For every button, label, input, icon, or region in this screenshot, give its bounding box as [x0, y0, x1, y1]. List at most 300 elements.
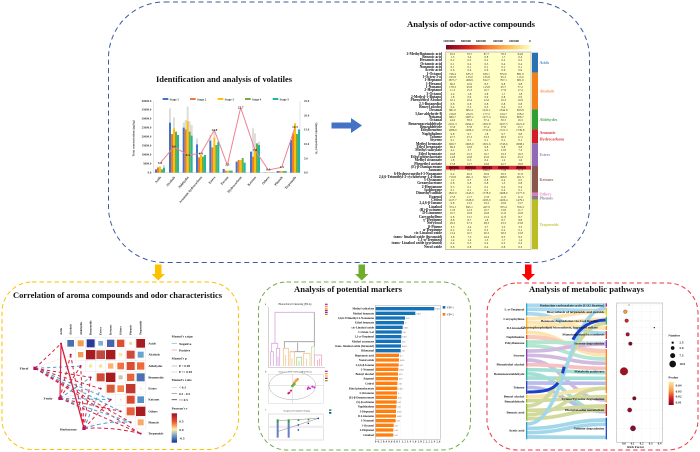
- heatmap table: 27.3: [467, 135, 472, 139]
- heatmap colour scale: 800000: [461, 39, 471, 43]
- mantel legend: 0.0: [179, 428, 184, 432]
- VIP significance labels: 0.001: [402, 346, 406, 348]
- heatmap table: 104.7: [500, 112, 507, 116]
- heatmap table: 9.8: [484, 145, 488, 149]
- heatmap table: 0.6: [501, 68, 505, 72]
- heatmap table: 802.4: [466, 108, 473, 112]
- VIP significance labels: 0.1: [400, 355, 402, 357]
- heatmap table: 9.3: [518, 235, 522, 239]
- legend: stages: Stage 2: [197, 97, 207, 101]
- heatmap table: 0.5: [518, 178, 522, 182]
- heatmap table: 2098.1: [516, 142, 524, 146]
- heatmap table: Nerol oxide: [424, 245, 442, 249]
- row labels: Aldehydes: [148, 364, 163, 368]
- heatmap table: 28.3: [501, 135, 506, 139]
- heatmap table: 1743.6: [499, 142, 507, 146]
- heatmap table: 0.3: [518, 105, 522, 109]
- heatmap table: 1328.0: [465, 198, 474, 202]
- line value labels: 22.7: [238, 106, 244, 110]
- heatmap table: 797.1: [500, 78, 507, 82]
- row labels: Acids: [148, 341, 157, 345]
- heatmap table: 1608.0: [499, 191, 507, 195]
- heatmap table: 8.7: [501, 218, 505, 222]
- heatmap table: 3.3: [518, 225, 522, 229]
- VIP labels: 1-Nonanal: [361, 419, 374, 423]
- column labels: Benzenoids: [89, 320, 93, 335]
- heatmap table: 2,3-Butanediol: [419, 102, 442, 106]
- VIP<1 orange bars: [376, 354, 399, 437]
- heatmap table: 861.0: [449, 108, 456, 112]
- heatmap table: 10.7: [484, 88, 489, 92]
- VIP bar chart: [335, 305, 454, 443]
- heatmap category labels: Phenols: [540, 196, 553, 200]
- left axis ticks: 15000.0: [142, 144, 152, 148]
- heatmap table: 0.2: [451, 58, 454, 62]
- heatmap table: 1731.6: [482, 128, 490, 132]
- heatmap table: 24.6: [450, 118, 455, 122]
- heatmap table: 15.7: [518, 125, 523, 129]
- category labels: Others: [261, 175, 271, 185]
- heatmap table: 95.7: [501, 85, 506, 89]
- VIP labels: Methyl benzoate: [353, 311, 375, 315]
- heatmap table: 0.8: [518, 102, 522, 106]
- heatmap table: Octanoic acid: [420, 62, 442, 66]
- heatmap table: 28.3: [484, 221, 489, 225]
- heatmap table: 25.6: [484, 155, 489, 159]
- heatmap table: α-Terpinene: [423, 228, 442, 232]
- heatmap table: 77.2: [518, 85, 523, 89]
- heatmap table: 806.7: [517, 115, 524, 119]
- heatmap table: 0.9: [518, 95, 522, 99]
- heatmap table: 1-Nonanol: [426, 85, 442, 89]
- heatmap highlighted row: [446, 166, 531, 170]
- heatmap table: 115.0: [517, 75, 524, 79]
- heatmap table: Benzoic acid: [422, 55, 442, 59]
- heatmap table: 0.2: [484, 228, 488, 232]
- heatmap table: 1479.1: [516, 198, 524, 202]
- heatmap table: Phenylethyl Alcohol: [411, 98, 442, 102]
- VIP labels: 2,4,6-β-Ionone: [356, 363, 375, 367]
- heatmap table: 466.9: [466, 78, 473, 82]
- heatmap table: Acetic acid: [425, 68, 442, 72]
- heatmap table: 13.3: [484, 215, 489, 219]
- heatmap table: 47.7: [450, 135, 455, 139]
- heatmap table: 10.8: [518, 211, 523, 215]
- heatmap table: 39.3: [501, 172, 506, 176]
- VIP>1 blue bars: [376, 307, 434, 352]
- heatmap table: 2101.3: [448, 122, 457, 126]
- sankey flows: [527, 305, 606, 437]
- heatmap table: 16.3: [518, 118, 523, 122]
- heatmap table: 87.7: [484, 52, 489, 56]
- heatmap table: 222.9: [466, 112, 473, 116]
- heatmap table: D-Limonene: [422, 211, 442, 215]
- heatmap table: 0.4: [451, 241, 454, 245]
- right axis ticks: [304, 99, 310, 175]
- VIP significance labels: 0.01: [399, 379, 402, 381]
- heatmap table: 606.7: [449, 142, 456, 146]
- VIP significance labels: 0.001: [398, 388, 403, 390]
- heatmap category labels: Esters: [540, 152, 551, 157]
- mantel legend: Mantel's r.abs: [172, 378, 192, 382]
- heatmap table: 1086.0: [448, 128, 457, 132]
- heatmap table: 901.3: [483, 165, 490, 169]
- heatmap table: 1,1-α-Terpineol: [418, 238, 442, 242]
- VIP significance labels: 0.01: [398, 383, 402, 385]
- arrow: orange down: [152, 264, 165, 280]
- VIP significance labels: 0.001: [400, 360, 404, 362]
- legend: stages: Stage 5: [280, 97, 289, 101]
- sankey left labels: Naphthalene: [506, 335, 525, 339]
- pvalue legend: 0.04: [676, 384, 682, 388]
- heatmap table: 8.7: [468, 218, 471, 222]
- heatmap table: 4.2: [451, 148, 454, 152]
- heatmap category labels: Terpenoids: [540, 222, 559, 227]
- heatmap table: 2.8: [484, 92, 488, 96]
- bubble plot: 0.0: [622, 442, 626, 446]
- heading: odor-active compounds: Analysis of odor-active compounds: [407, 20, 536, 29]
- heatmap table: 1.7: [501, 238, 505, 242]
- heatmap table: 0.4: [484, 158, 488, 162]
- heatmap table: 16.8: [467, 155, 472, 159]
- VIP axis: 0 0.2 0.4 0.6 0.8 1 1.2 1.4 1.6 1.8 2 2.2 2.4 2.6: [375, 440, 441, 443]
- PCA score plot: [265, 370, 328, 403]
- heatmap frame: [446, 52, 531, 250]
- heatmap table: 681.6: [517, 78, 524, 82]
- sankey left labels: Phenylethyl alcohol: [497, 362, 524, 366]
- pvalue legend: [668, 376, 682, 405]
- heatmap table: 160.2: [483, 168, 490, 172]
- heatmap table: 0.8: [484, 178, 488, 182]
- mantel legend: -0.5: [179, 437, 185, 441]
- dendrogram: a: [265, 303, 267, 306]
- heatmap table: 872.0: [500, 72, 507, 76]
- heatmap table: 1.8: [484, 132, 488, 136]
- heatmap table: Ethylbenzene: [421, 128, 442, 132]
- heatmap table: 0.1: [518, 65, 522, 69]
- heatmap table: 16.7: [484, 152, 489, 156]
- VIP labels: Ethyl benzoate: [355, 321, 375, 325]
- VIP labels: 1-Octanol: [361, 423, 374, 427]
- heatmap table: 0.4: [501, 178, 505, 182]
- heatmap table: Linalool: [429, 205, 442, 209]
- VIP significance labels: 0.01: [403, 332, 406, 334]
- heatmap table: 16.8: [467, 145, 472, 149]
- category labels: Acids: [154, 175, 163, 184]
- heatmap table: Naphthalene: [422, 132, 442, 136]
- heatmap table: 881.0: [517, 72, 524, 76]
- bubble plot: 0.1: [631, 442, 635, 446]
- sankey left labels: Acetic acid: [509, 429, 524, 433]
- heatmap table: 13.8: [518, 231, 523, 235]
- stage 2 bars: [157, 129, 294, 173]
- heatmap table: 10.9: [467, 82, 472, 86]
- heatmap table: Geranylacetone: [417, 181, 442, 185]
- heatmap table: Eugenol: [429, 195, 442, 199]
- VIP labels: [335, 307, 375, 437]
- heatmap table: 374.1: [449, 205, 456, 209]
- mantel legend: 0.5: [179, 419, 184, 423]
- bubble plot: 0.4: [658, 442, 662, 446]
- PCA score plot: b: [265, 371, 267, 374]
- heatmap table: 38.3: [467, 118, 472, 122]
- heatmap table: 75.1: [467, 168, 472, 172]
- heatmap table: 1.4: [468, 238, 471, 242]
- arrow: red down: [522, 264, 535, 280]
- heatmap table: 1087.2: [465, 115, 474, 119]
- heatmap table: 0.8: [484, 181, 488, 185]
- line value labels: 15.5: [292, 125, 298, 129]
- right axis ticks: 25.0: [304, 99, 310, 103]
- heatmap table: 135.0: [466, 75, 473, 79]
- heatmap category bar: [532, 53, 538, 249]
- heatmap table: 0.3: [468, 105, 471, 109]
- heatmap table: 1-Heptanol: [424, 78, 442, 82]
- sankey left labels: Benzeneacetaldehyde: [494, 372, 525, 376]
- heatmap table: 37.8: [467, 125, 472, 129]
- heatmap table: 79.7: [467, 52, 472, 56]
- heatmap table: 17.8: [450, 162, 455, 166]
- heatmap table: 9.8: [501, 82, 505, 86]
- heatmap table: 10.1: [450, 98, 455, 102]
- heatmap table: 3.7: [468, 148, 471, 152]
- row labels: Terpenoids: [148, 432, 164, 436]
- line value labels: 6.9: [199, 151, 203, 155]
- heatmap table: 845.1: [466, 205, 473, 209]
- left axis ticks: 10000.0: [142, 153, 152, 157]
- sankey left labels: Benzaldehyde: [505, 399, 525, 403]
- column labels: Esters: [99, 326, 103, 335]
- heatmap table: 0.1: [451, 188, 454, 192]
- heatmap table: 0.9: [468, 95, 471, 99]
- heatmap table: 71.3: [518, 168, 523, 172]
- heatmap table: 13.4: [450, 231, 455, 235]
- heatmap table: 0.1: [468, 185, 471, 189]
- VIP labels: 1-Octen-3-ol: [358, 330, 374, 334]
- heatmap table: 1.4: [451, 238, 454, 242]
- heatmap table: 1301.6: [482, 142, 490, 146]
- heatmap table: 18.8: [518, 162, 523, 166]
- VIP labels: Ethyl phenylacetate: [349, 386, 375, 390]
- panel: top volatiles and odor-active compounds: [108, 2, 590, 262]
- heatmap table: 108.2: [517, 112, 524, 116]
- VIP labels: Nonal oxide: [359, 358, 375, 362]
- heatmap table: 0.2: [484, 185, 488, 189]
- heatmap table: 33.3: [484, 135, 489, 139]
- line value labels: 0.9: [266, 168, 271, 172]
- heatmap table: 11.8: [450, 208, 455, 212]
- heatmap table: 78.3: [501, 52, 506, 56]
- heatmap table: 0.1: [501, 65, 505, 69]
- number legend: 2.5: [679, 341, 684, 345]
- heatmap table: 11.0: [518, 195, 523, 199]
- sankey right labels: Reduction carboxylate cycle (CO2 fixation): [540, 303, 604, 307]
- heatmap table: 0.6: [484, 68, 488, 72]
- arrow: blue right: [332, 118, 362, 133]
- heatmap table: Hexanoic acid: [420, 58, 442, 62]
- legend: stages: Stage 1: [170, 97, 179, 101]
- heatmap table: 11.3: [450, 88, 455, 92]
- heatmap table: 4.3: [484, 148, 488, 152]
- heatmap table: Ethyl phenylacetate: [411, 155, 442, 159]
- left axis ticks: 20000.0: [142, 135, 152, 139]
- heatmap table: 3.8: [451, 235, 454, 239]
- heatmap table: (R)-β-ocimene: [420, 208, 442, 212]
- column labels: Acids: [59, 327, 63, 335]
- network nodes: [33, 343, 142, 435]
- left axis ticks: 25000.0: [142, 126, 152, 130]
- mantel legend: Pearson's r: [172, 406, 188, 410]
- heading: identification of volatiles: Identification and analysis of volatiles: [156, 75, 293, 84]
- heatmap table: 1561.8: [482, 122, 490, 126]
- left axis ticks: 30000.0: [142, 117, 152, 121]
- row labels: Others: [148, 409, 158, 413]
- VIP significance labels: 0.001: [416, 313, 421, 315]
- VIP labels: Cedrol: [365, 381, 374, 385]
- heatmap table: 95.8: [467, 85, 472, 89]
- heatmap table: 0.2: [484, 58, 488, 62]
- left axis ticks: 35000.0: [142, 108, 152, 112]
- heatmap table: 93.2: [450, 52, 455, 56]
- VIP significance labels: 0.001: [397, 411, 401, 413]
- heatmap table: Benzeneacetaldehyde: [408, 122, 442, 126]
- heatmap table: 37.4: [484, 118, 489, 122]
- sankey right labels: Biosynthesis of terpenoids and steroids: [547, 310, 605, 314]
- heatmap table: 0.1: [501, 138, 505, 142]
- heatmap table: 0.1: [484, 138, 488, 142]
- heatmap table: 1.2: [451, 178, 454, 182]
- permutation plot: [265, 409, 331, 440]
- heatmap table: 1.3: [484, 238, 488, 242]
- heatmap table: β-Pinene: [428, 225, 442, 229]
- bubble plot: [617, 303, 663, 449]
- right axis ticks: 10.0: [304, 142, 310, 146]
- heatmap table: 16.8: [450, 152, 455, 156]
- heatmap table: 9.7: [468, 132, 471, 136]
- heatmap table: 0.8: [484, 102, 488, 106]
- heatmap table: 0.3: [518, 245, 522, 249]
- heatmap table: 0.4: [501, 62, 505, 66]
- VIP significance labels: 0.01: [397, 407, 401, 409]
- number legend: [668, 333, 685, 367]
- heatmap table: Toluene: [430, 135, 442, 139]
- category labels: Aldehydes: [177, 175, 190, 189]
- heatmap table: 960.7: [449, 115, 456, 119]
- heatmap category labels: Ketones: [540, 177, 554, 182]
- VIP significance labels: 0.001: [399, 369, 404, 371]
- heatmap table: 1875.7: [448, 78, 457, 82]
- heatmap table: 0.1: [484, 188, 488, 192]
- right axis ticks: 5.0: [304, 156, 308, 160]
- heatmap table: 1.6: [518, 158, 522, 162]
- heatmap table: 0.8: [501, 245, 505, 249]
- heatmap table: 1269.2: [465, 128, 474, 132]
- heatmap table: 2221.9: [516, 122, 524, 126]
- bubble plot: 0.3: [649, 442, 653, 446]
- heatmap table: 8.8: [518, 218, 522, 222]
- heatmap table: 15.3: [467, 152, 472, 156]
- category labels: [154, 175, 298, 204]
- sankey right labels: Metabolic pathways: [574, 369, 605, 373]
- heatmap table: 498.0: [500, 175, 507, 179]
- VIP labels: 3-Heptanol: [360, 409, 374, 413]
- heatmap table: 13.3: [467, 201, 472, 205]
- dendrogram: [265, 303, 328, 367]
- heatmap table: 0.2: [468, 228, 471, 232]
- heatmap table: 0.1: [484, 65, 488, 69]
- heatmap table: 177.2: [483, 112, 490, 116]
- heatmap table: 12.6: [484, 98, 489, 102]
- heatmap table: 195.8: [449, 75, 456, 79]
- heatmap table: 0.1: [451, 62, 454, 66]
- VIP significance labels: 0.001: [397, 416, 401, 418]
- number legend: 10.0: [679, 362, 685, 366]
- heatmap table: 15.3: [467, 88, 472, 92]
- pvalue legend: 0.03: [676, 389, 682, 393]
- heatmap table: 1406.4: [499, 198, 507, 202]
- heatmap table: 0.4: [484, 241, 488, 245]
- heatmap table: 0.8: [518, 181, 522, 185]
- heatmap table: Cedrol: [431, 198, 442, 202]
- heatmap table: Nonanal: [429, 115, 442, 119]
- heatmap table: 0.8: [501, 102, 505, 106]
- heatmap table: 0.8: [451, 181, 454, 185]
- heatmap table: 9.8: [518, 82, 522, 86]
- heatmap table: 0.6: [468, 68, 471, 72]
- heatmap table: 1063.9: [465, 142, 474, 146]
- chart: volatile concentration by stage: [131, 97, 319, 204]
- heatmap table: Ethyl hexanoate: [416, 145, 442, 149]
- VIP labels: trans- linalool oxide (furanoid): [335, 344, 374, 348]
- VIP labels: 1-Nonanol: [361, 367, 374, 371]
- heatmap table: 37.8: [501, 125, 506, 129]
- PCA score plot: Scores on PC1 vs PC2 (OPLS-DA): [279, 370, 312, 373]
- mantel legend: 0.3 - 0.5: [179, 392, 190, 396]
- heatmap table: 1543.3: [465, 191, 474, 195]
- right axis ticks: 15.0: [304, 128, 310, 132]
- sankey left labels: Benzoic acid: [506, 410, 524, 414]
- heading: correlation: Correlation of aroma compounds and odor characteristics: [13, 291, 223, 300]
- heatmap table: 0.3: [468, 158, 471, 162]
- VIP labels: 2-Heptanol: [360, 428, 374, 432]
- heatmap table: 1-Octen-3-ol: [422, 75, 442, 79]
- heatmap table: 17.2: [518, 88, 523, 92]
- dendrogram: Hierarchical Clustering (HCA): [279, 303, 312, 306]
- heatmap table: Styrene: [430, 138, 442, 142]
- heatmap table: 1277.4: [482, 115, 490, 119]
- heatmap table: 0.2: [501, 228, 505, 232]
- heatmap table: 3-Octanol: [426, 92, 442, 96]
- heatmap table: (E)-β-Damascenone: [411, 165, 442, 169]
- heatmap table: 10.4: [467, 98, 472, 102]
- heatmap colour scale: [443, 39, 531, 50]
- heatmap table: 2,4,6-β-Ionone: [419, 201, 442, 205]
- stage 4 bars: [161, 132, 298, 173]
- stage 1 bars: [155, 123, 292, 173]
- heatmap table: 1043.8: [448, 165, 457, 169]
- heatmap table: 0.2: [468, 58, 471, 62]
- heatmap table: 0.4: [518, 55, 522, 59]
- heatmap table: 17.8: [484, 195, 489, 199]
- VIP labels: D-Limonene: [358, 414, 375, 418]
- heading: potential markers: Analysis of potential markers: [294, 285, 403, 294]
- heatmap table: Methyl salicylate: [415, 148, 442, 152]
- VIP labels: Methyl octanoate: [352, 339, 375, 343]
- heatmap table: 23.3: [501, 221, 506, 225]
- heatmap table: 23.8: [518, 221, 523, 225]
- heatmap table: γ-Terpinene: [423, 218, 442, 222]
- heatmap table: 20.3: [484, 231, 489, 235]
